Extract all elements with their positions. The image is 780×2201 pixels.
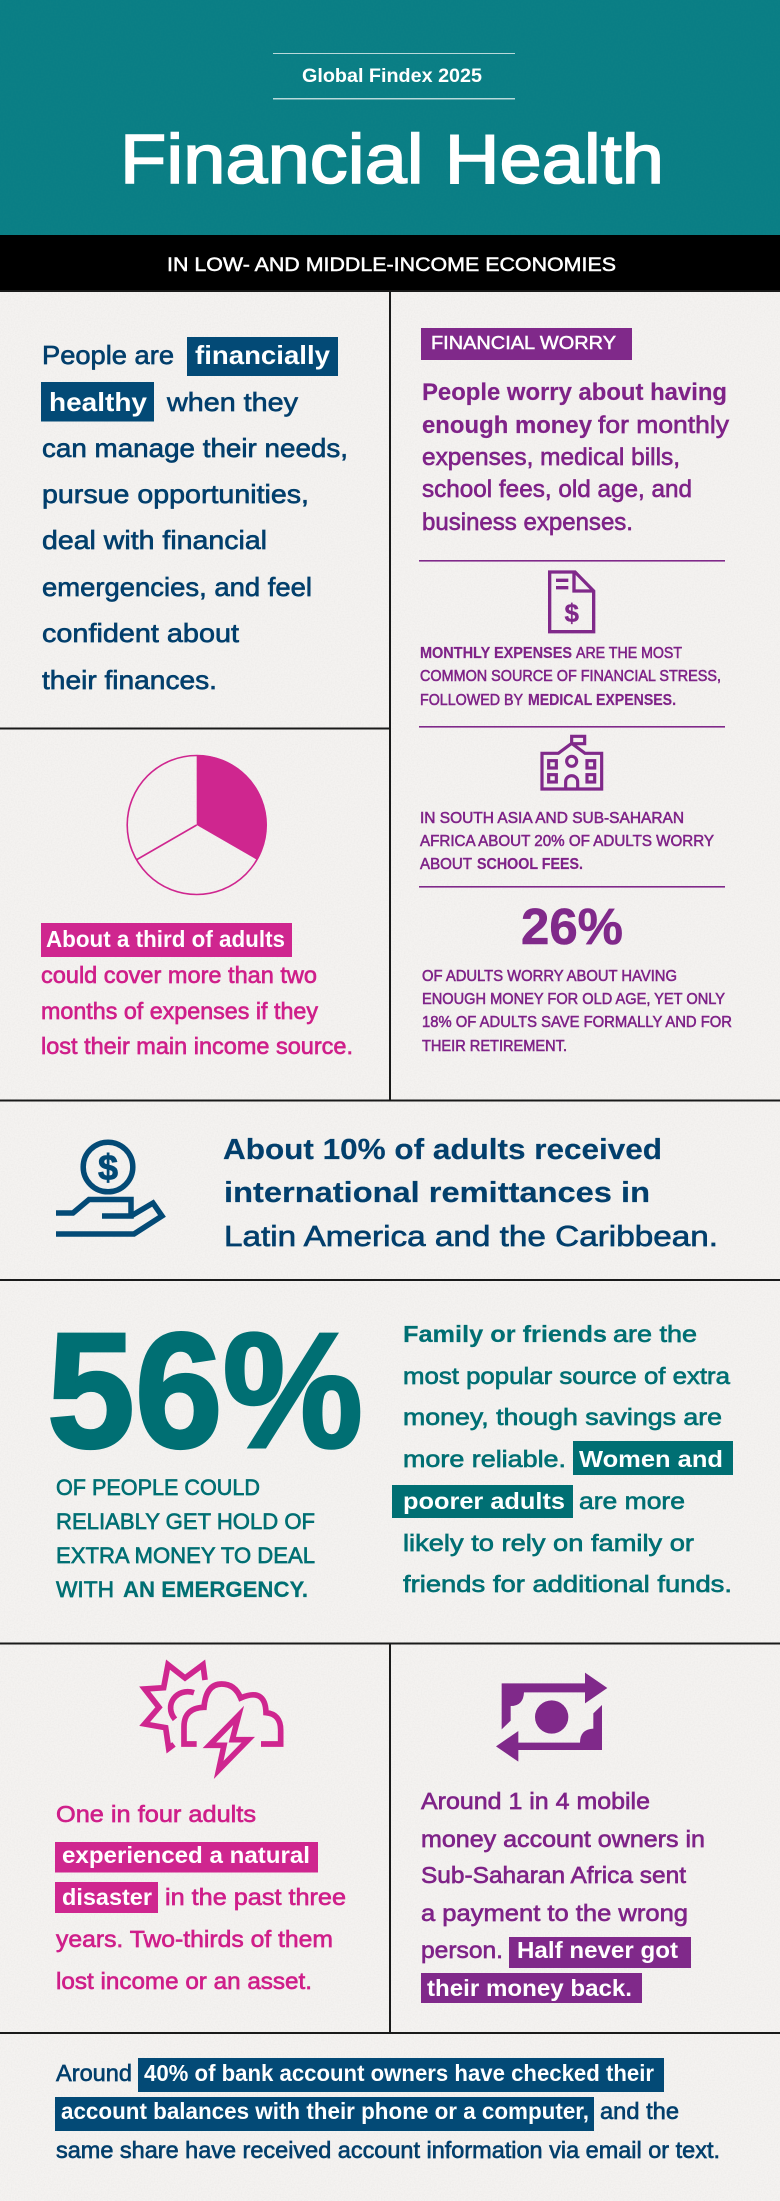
panel: definition of financial health [41, 337, 348, 695]
panel: definition of financial health: People are [42, 340, 174, 370]
panel: third of adults text: months of expenses if they [41, 998, 318, 1024]
panel: mobile money text [421, 1788, 705, 2003]
56% statistic: 56% [47, 1299, 363, 1482]
panel: family or friends text: money, though savings are [403, 1404, 722, 1430]
financial worry intro: expenses, medical bills, [422, 444, 680, 471]
panel: definition of financial health: their finances. [42, 665, 217, 695]
financial worry tag [421, 328, 632, 360]
icon: school building [542, 736, 602, 789]
panel: third of adults text [41, 923, 353, 1059]
icon: hand holding coin [56, 1142, 162, 1234]
panel: family or friends text: likely to rely on family or [403, 1530, 694, 1556]
icon: hand holding coin: $ [98, 1147, 118, 1188]
panel: definition of financial health: pursue opportunities, [42, 479, 309, 509]
school fees note: AFRICA ABOUT 20% OF ADULTS WORRY [420, 833, 715, 850]
panel: mobile money text: money account owners in [421, 1826, 705, 1852]
panel: family or friends text: more reliable. [403, 1446, 566, 1472]
financial worry intro: business expenses. [422, 509, 633, 536]
panel: natural disaster text: lost income or an asset. [56, 1968, 312, 1994]
panel: 56% caption [56, 1475, 315, 1602]
panel: bank account owners text: 40% of bank account owners have checked their [144, 2060, 654, 2086]
panel: 56% caption: EXTRA MONEY TO DEAL [56, 1543, 315, 1568]
header banner [0, 0, 780, 235]
icon: sun, cloud and lightning [145, 1665, 281, 1770]
financial worry tag: FINANCIAL WORRY [431, 332, 616, 353]
panel: family or friends text: poorer adults [403, 1488, 565, 1514]
panel: definition of financial health: confident about [42, 618, 240, 648]
financial worry intro: for monthly [598, 412, 730, 439]
monthly expenses note: MONTHLY EXPENSES [420, 645, 572, 662]
panel: definition of financial health: deal with financial [42, 525, 267, 555]
panel: natural disaster text: One in four adults [56, 1801, 256, 1827]
panel: bank account owners text: same share have received account information via email or text. [56, 2137, 720, 2163]
panel: third of adults text: About a third of adults [46, 926, 285, 952]
panel: definition of financial health: healthy [49, 387, 148, 417]
panel: bank account owners text: account balances with their phone or a computer, [61, 2098, 589, 2124]
panel: mobile money text: Around 1 in 4 mobile [421, 1788, 650, 1814]
panel: definition of financial health: when they [166, 387, 298, 417]
retirement note: ENOUGH MONEY FOR OLD AGE, YET ONLY [422, 991, 726, 1008]
icon: money transfer arrows [496, 1673, 607, 1762]
retirement note: OF ADULTS WORRY ABOUT HAVING [422, 968, 677, 985]
panel: family or friends text [392, 1321, 733, 1597]
financial worry intro: enough money [422, 412, 592, 439]
panel: natural disaster text: years. Two-thirds of them [56, 1926, 333, 1952]
panel: remittances text: Latin America and the Caribbean. [224, 1221, 718, 1253]
monthly expenses note: FOLLOWED BY [420, 692, 524, 709]
retirement note [422, 968, 732, 1055]
panel: definition of financial health: emergencies, and feel [42, 572, 312, 602]
financial worry intro [422, 379, 730, 536]
26% statistic: 26% [521, 898, 623, 955]
monthly expenses note: ARE THE MOST [576, 645, 682, 662]
icon: bill with dollar sign [550, 572, 594, 632]
panel: remittances text [223, 1134, 718, 1253]
panel: natural disaster text [55, 1801, 346, 1994]
panel: definition of financial health: can manage their needs, [42, 433, 348, 463]
panel: family or friends text: most popular source of extra [403, 1363, 730, 1389]
subtitle band: IN LOW- AND MIDDLE-INCOME ECONOMIES [167, 254, 616, 276]
financial worry intro: People worry about having [422, 379, 727, 406]
panel: bank account owners text: and the [600, 2098, 679, 2124]
panel: family or friends text: Women and [579, 1446, 723, 1472]
panel: third of adults text: could cover more than two [41, 962, 317, 988]
panel: 56% caption: WITH [56, 1577, 114, 1602]
panel: financial worry [419, 328, 732, 1055]
panel: family or friends text: are more [579, 1488, 685, 1514]
panel: definition of financial health: financially [195, 340, 331, 370]
panel: remittances text: About 10% of adults received [223, 1134, 662, 1166]
title: Financial Health [120, 120, 664, 198]
pie chart: one third [127, 755, 267, 894]
icon: bill with dollar sign: $ [564, 598, 579, 628]
panel dividers [0, 290, 780, 2034]
panel: mobile money text: their money back. [427, 1975, 632, 2001]
panel: natural disaster text: disaster [62, 1884, 152, 1910]
panel: remittances text: international remittances in [224, 1177, 650, 1209]
panel: natural disaster text: experienced a natural [62, 1842, 310, 1868]
panel: natural disaster text: in the past three [165, 1884, 346, 1910]
school fees note: ABOUT [420, 856, 472, 873]
monthly expenses note: MEDICAL EXPENSES. [528, 692, 676, 709]
panel: 56% caption: AN EMERGENCY. [123, 1577, 308, 1602]
series label: Global Findex 2025 [302, 66, 482, 87]
panel: mobile money text: a payment to the wrong [421, 1900, 688, 1926]
panel: 56% caption: OF PEOPLE COULD [56, 1475, 260, 1500]
school fees note [420, 810, 715, 873]
panel: third of adults text: lost their main income source. [41, 1033, 353, 1059]
panel: bank account owners text [55, 2058, 720, 2163]
panel: family or friends text: are the [613, 1321, 697, 1347]
monthly expenses note [420, 645, 721, 709]
retirement note: THEIR RETIREMENT. [422, 1038, 567, 1055]
panel: family or friends text: friends for additional funds. [403, 1571, 732, 1597]
monthly expenses note: COMMON SOURCE OF FINANCIAL STRESS, [420, 668, 721, 685]
panel: 56% caption: RELIABLY GET HOLD OF [56, 1509, 315, 1534]
panel: mobile money text: person. [421, 1937, 503, 1963]
school fees note: IN SOUTH ASIA AND SUB-SAHARAN [420, 810, 684, 827]
retirement note: 18% OF ADULTS SAVE FORMALLY AND FOR [422, 1014, 732, 1031]
panel: mobile money text: Sub-Saharan Africa sent [421, 1862, 686, 1888]
subtitle band [0, 235, 780, 291]
panel: family or friends text: Family or friends [403, 1321, 607, 1347]
school fees note: SCHOOL FEES. [477, 856, 583, 873]
panel: bank account owners text: Around [56, 2060, 132, 2086]
financial worry intro: school fees, old age, and [422, 476, 692, 503]
panel: mobile money text: Half never got [517, 1937, 678, 1963]
